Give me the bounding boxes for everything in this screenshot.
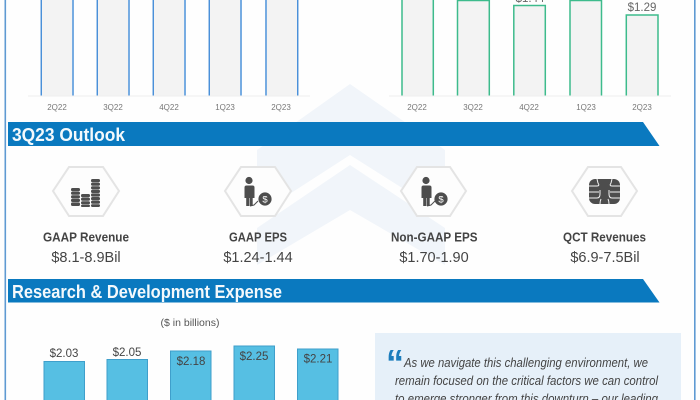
callout: CEO quote: As we navigate this challenging environment, we	[403, 356, 648, 370]
chart: R&D expense bars: $2.05	[113, 347, 141, 359]
value: $6.9-7.5Bil	[570, 250, 640, 266]
chart: revenue bars: 4Q22	[159, 103, 179, 112]
background watermark chevrons	[257, 84, 445, 265]
callout: CEO quote	[375, 333, 681, 400]
value: $1.70-1.90	[399, 250, 469, 266]
heading banner: 3Q23 Outlook: 3Q23 Outlook	[12, 125, 126, 145]
icon: quote mark: “	[386, 342, 404, 383]
chart: R&D expense bars	[44, 317, 338, 400]
chart: revenue bars: 2Q23	[271, 103, 291, 112]
chart: R&D expense bars: $2.03	[50, 348, 78, 360]
icon: person with dollar coin: $	[262, 194, 268, 206]
callout: CEO quote: remain focused on the critical factors we can control	[395, 374, 659, 388]
heading banner: Research & Development Expense: Research & Development Expense	[12, 282, 282, 302]
outlook item: GAAP Revenue	[43, 167, 129, 266]
label: GAAP EPS	[229, 230, 287, 244]
chart: R&D expense bars: $2.18	[177, 356, 205, 368]
chart: revenue bars: 3Q22	[103, 103, 123, 112]
label: GAAP Revenue	[43, 230, 129, 244]
icon: coin stacks	[53, 167, 119, 216]
unit note: ($ in billions)	[161, 317, 219, 329]
label: Non-GAAP EPS	[391, 230, 478, 244]
chart: revenue bars: 2Q22	[47, 103, 67, 112]
icon: chip	[572, 167, 637, 216]
chart: EPS bars: $1.29	[628, 2, 656, 14]
chart: EPS bars	[389, 0, 671, 112]
chart: EPS bars: 2Q23	[632, 103, 652, 112]
icon: person with dollar coin: $	[438, 194, 444, 206]
chart: revenue bars: 1Q23	[215, 103, 235, 112]
outlook item: QCT Revenues	[563, 167, 646, 266]
outlook item: GAAP EPS	[223, 167, 293, 266]
heading banner: Research & Development Expense	[8, 279, 660, 302]
chart: R&D expense bars: $2.25	[240, 351, 268, 363]
heading banner: 3Q23 Outlook	[8, 122, 660, 146]
chart: EPS bars: 1Q23	[576, 103, 596, 112]
chart: EPS bars: 2Q22	[407, 103, 427, 112]
value: $1.24-1.44	[223, 250, 293, 266]
chart: revenue bars	[28, 0, 310, 112]
chart: EPS bars: 4Q22	[519, 103, 539, 112]
chart: EPS bars: 3Q22	[463, 103, 483, 112]
value: $8.1-8.9Bil	[51, 250, 121, 266]
label: QCT Revenues	[563, 230, 646, 244]
chart: R&D expense bars: $2.21	[304, 354, 332, 366]
outlook item: Non-GAAP EPS	[391, 167, 478, 266]
